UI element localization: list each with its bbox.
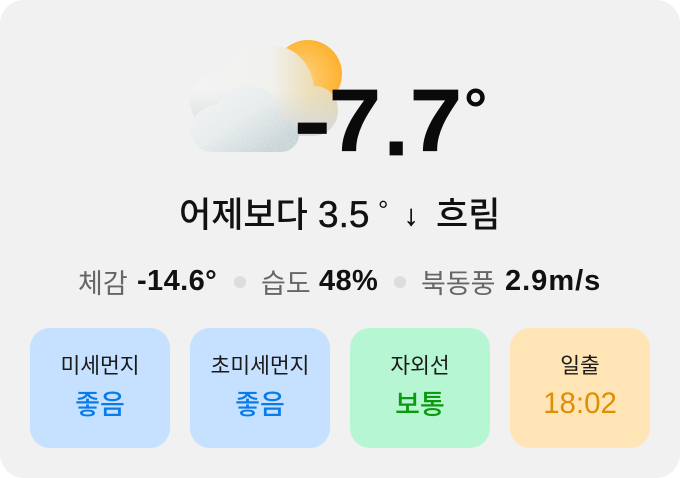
- separator dot: [234, 276, 246, 288]
- wind value: 2.9m/s: [505, 265, 601, 297]
- card: fine dust: [30, 328, 170, 448]
- card: fine dust: 좋음: [75, 383, 125, 422]
- feels like value: -14.6°: [137, 265, 217, 297]
- wind label: 북동풍: [421, 262, 496, 301]
- card: UV: 보통: [395, 383, 445, 422]
- card: sunrise: 18:02: [543, 387, 617, 420]
- icon: sun behind clouds: [190, 40, 342, 152]
- card: ultrafine dust: 초미세먼지: [211, 349, 309, 380]
- card: sunrise: [510, 328, 650, 448]
- temperature: 7: [410, 71, 462, 170]
- comparison summary: 3.5: [318, 194, 369, 235]
- temperature: °: [464, 77, 487, 142]
- card: UV: 자외선: [390, 349, 450, 380]
- card: sunrise: 일출: [560, 349, 600, 380]
- comparison summary: °: [378, 195, 388, 225]
- comparison summary: ↓: [404, 200, 418, 232]
- temperature: -: [294, 71, 331, 170]
- humidity label: 습도: [261, 262, 311, 301]
- temperature: .: [384, 75, 408, 174]
- separator dot: [394, 276, 406, 288]
- humidity value: 48%: [319, 265, 378, 297]
- comparison summary: 흐림: [436, 187, 500, 238]
- card: ultrafine dust: [190, 328, 330, 448]
- card: fine dust: 미세먼지: [60, 349, 140, 380]
- card: UV: [350, 328, 490, 448]
- temperature: [294, 71, 487, 174]
- comparison summary: [179, 187, 500, 238]
- feels like label: 체감: [78, 262, 128, 301]
- card: ultrafine dust: 좋음: [235, 383, 285, 422]
- temperature: 7: [329, 71, 381, 170]
- comparison summary: 어제보다: [179, 187, 308, 238]
